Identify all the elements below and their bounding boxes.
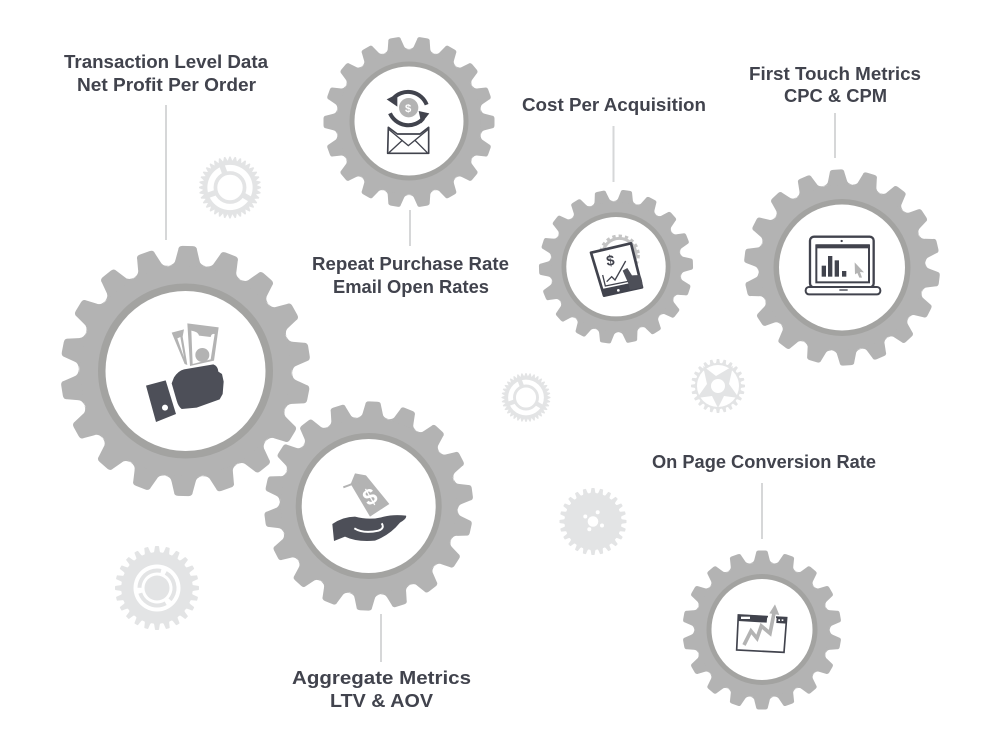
icon: hand holding cash (146, 323, 224, 422)
decorative gear: top left (199, 156, 261, 218)
icon: tablet with chart and hand (591, 236, 643, 296)
icon: hand receiving price tag: $ (358, 482, 382, 511)
icon: tablet with chart and hand: $ (605, 253, 616, 270)
label: aggregate metrics (292, 668, 471, 711)
label: transaction level data (64, 52, 269, 95)
label: cost per acquisition: Cost Per Acquisition (522, 95, 706, 115)
label: on page conversion rate: On Page Conversion Rate (652, 452, 876, 472)
gear: cost per acquisition (528, 180, 704, 354)
connector lines (166, 105, 835, 662)
label: first touch metrics (749, 64, 921, 106)
label: transaction level data: Net Profit Per Order (77, 75, 256, 95)
icon: browser window with rising arrow (737, 604, 787, 652)
label: transaction level data: Transaction Level Data (64, 52, 269, 72)
gear: repeat purchase rate (309, 23, 509, 221)
label: aggregate metrics: Aggregate Metrics (292, 668, 471, 688)
icon: envelope with dollar cycle: $ (405, 103, 412, 115)
gear: on page conversion rate (682, 550, 842, 710)
decorative gear: star (691, 359, 745, 413)
label: repeat purchase rate: Repeat Purchase Rate (312, 254, 509, 274)
gear: first touch metrics (738, 164, 946, 371)
gear: transaction level data (57, 244, 314, 498)
label: repeat purchase rate (312, 254, 509, 297)
label: first touch metrics: CPC & CPM (784, 86, 887, 106)
decorative gear: bottom left (115, 546, 199, 630)
icon: hand receiving price tag (332, 473, 406, 541)
decorative gear: centre (502, 373, 550, 422)
label: repeat purchase rate: Email Open Rates (333, 277, 489, 297)
icon: laptop with bar chart (806, 237, 880, 294)
decorative gear: solid with holes (560, 488, 626, 555)
icon: envelope with dollar cycle (387, 92, 429, 153)
gear: aggregate metrics (259, 397, 479, 615)
label: aggregate metrics: LTV & AOV (330, 691, 433, 711)
label: first touch metrics: First Touch Metrics (749, 64, 921, 84)
